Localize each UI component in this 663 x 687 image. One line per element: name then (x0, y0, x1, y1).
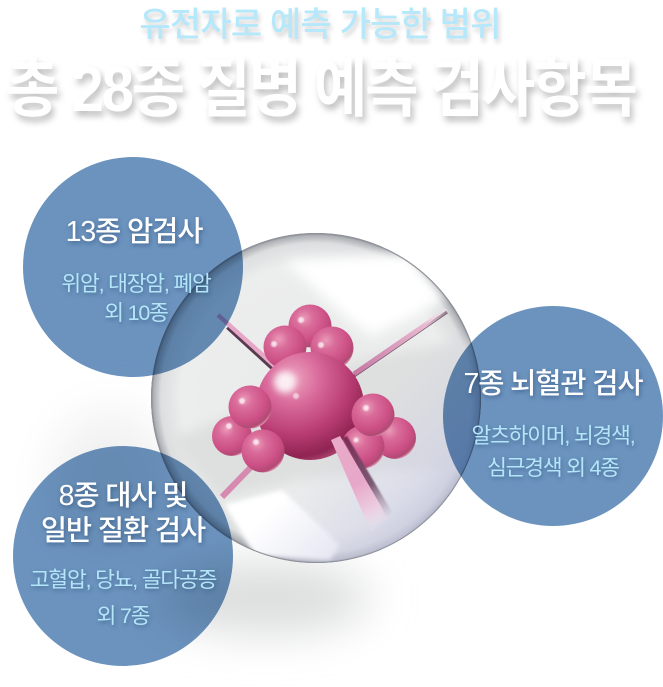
panel description: 외 10종 (104, 301, 168, 325)
glass sphere (151, 233, 481, 563)
rod: lower right (331, 436, 392, 534)
panel heading (41, 480, 208, 547)
sphere illustration (60, 233, 481, 649)
main title: 총 28종 질병 예측 검사항목 (6, 53, 636, 125)
panel heading: 일반 질환 검사 (41, 515, 205, 547)
panel description (472, 424, 635, 480)
subtitle: 유전자로 예측 가능한 범위 (139, 6, 501, 44)
panel description (30, 568, 216, 628)
panel heading: 7종 뇌혈관 검사 (463, 368, 643, 400)
panel: cancer screening (23, 157, 243, 377)
panel description: 알츠하이머, 뇌경색, (472, 424, 634, 448)
panel heading: 13종 암검사 (66, 216, 202, 248)
rods (218, 310, 447, 497)
panel description: 외 7종 (97, 604, 149, 628)
ground shadow (50, 410, 370, 634)
panel heading: 8종 대사 및 (59, 480, 187, 512)
panel: metabolic and general disease screening (13, 446, 233, 666)
panel description: 위암, 대장암, 폐암 (61, 272, 211, 296)
panel: cerebrovascular screening (443, 306, 663, 526)
panel description: 심근경색 외 4종 (487, 456, 619, 480)
panel description: 고혈압, 당뇨, 골다공증 (30, 568, 216, 592)
panel description (61, 272, 211, 325)
molecule (212, 304, 416, 472)
